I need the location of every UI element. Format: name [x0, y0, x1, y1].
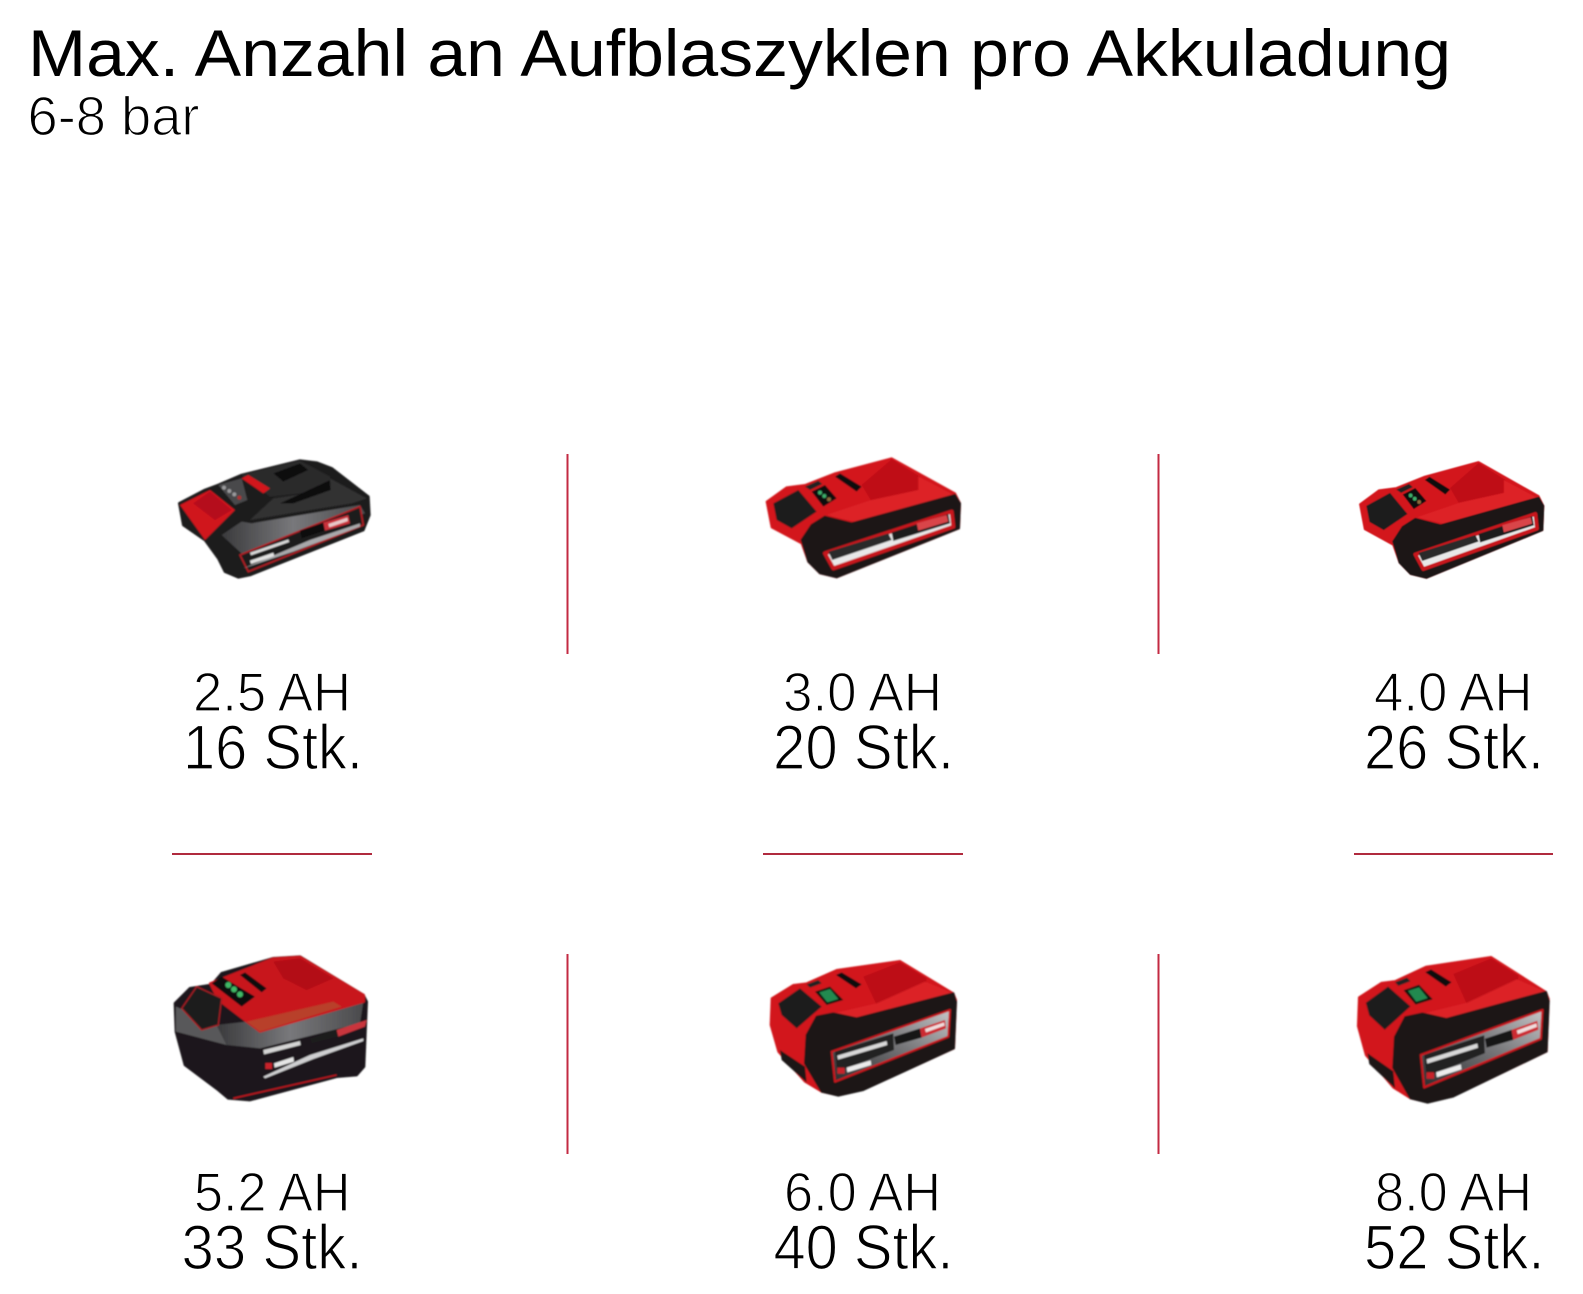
battery cell 3.0 AH: [767, 458, 960, 783]
label: 8.0 AH: 8.0 AH: [1375, 1161, 1532, 1223]
value: 16 Stk.: 16 Stk.: [183, 713, 363, 783]
label: 5.2 AH: 5.2 AH: [194, 1161, 350, 1223]
icon: battery 6.0 AH: [771, 961, 956, 1096]
label: 2.5 AH: 2.5 AH: [193, 661, 351, 723]
icon: battery 5.2 AH: [175, 957, 367, 1100]
label: 3.0 AH: 3.0 AH: [783, 661, 942, 723]
value: 20 Stk.: 20 Stk.: [773, 713, 954, 783]
icon: battery 8.0 AH: [1358, 957, 1549, 1103]
subtitle: 6-8 bar: [28, 85, 200, 147]
icon: battery 2.5 AH: [179, 461, 369, 577]
title: Max. Anzahl an Aufblaszyklen pro Akkuladung: [28, 16, 1451, 90]
battery cell 6.0 AH: [771, 961, 956, 1283]
battery cell 4.0 AH: [1360, 462, 1544, 783]
value: 40 Stk.: 40 Stk.: [774, 1213, 954, 1283]
value: 52 Stk.: 52 Stk.: [1364, 1213, 1544, 1283]
battery cell 2.5 AH: [179, 461, 369, 783]
battery cell 8.0 AH: [1358, 957, 1549, 1283]
icon: battery 4.0 AH: [1360, 462, 1543, 578]
value: 33 Stk.: 33 Stk.: [182, 1213, 362, 1283]
battery cell 5.2 AH: [175, 957, 367, 1283]
icon: battery 3.0 AH: [767, 458, 960, 577]
value: 26 Stk.: 26 Stk.: [1364, 713, 1544, 783]
label: 4.0 AH: 4.0 AH: [1374, 661, 1532, 723]
label: 6.0 AH: 6.0 AH: [784, 1161, 941, 1223]
